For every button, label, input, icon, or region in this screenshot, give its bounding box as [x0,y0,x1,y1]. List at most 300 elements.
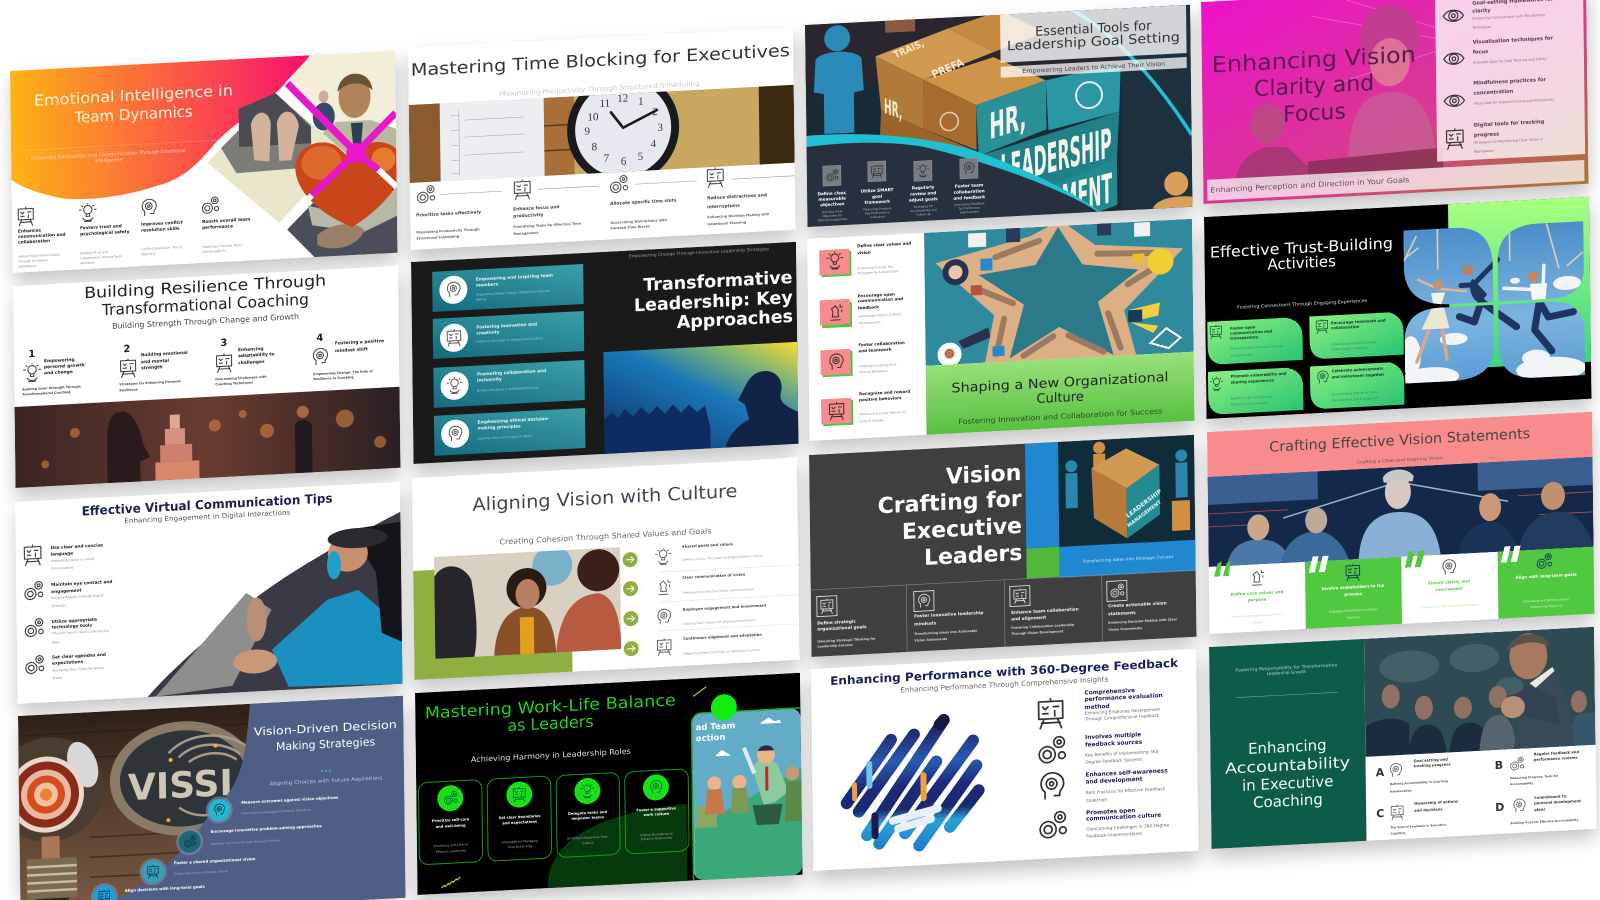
photo: HR cube and figures: MANAGEMENT [1126,499,1163,529]
slide: Enhancing Accountability in Executive Coaching [1209,627,1597,849]
four tool columns: review and [910,190,936,197]
subtitle: Enhancing Engagement in Digital Interactions [124,509,291,525]
benefit columns: performance [202,223,233,231]
right list panel: clarity [1472,8,1491,15]
slide: Mastering Work-Life Balance as Leaders [415,672,814,900]
feature list: performance evaluation [1085,693,1163,703]
four tool columns: Define clear, [817,190,847,196]
step labels: productivity [513,212,543,220]
step labels: Focused Time Blocks [610,224,650,230]
benefit columns: Through Emotional [17,258,48,264]
accountability grid: B [1495,759,1503,772]
tip list: Enhancing Clarity in Virtual [51,557,94,563]
subtitle: Maximizing Productivity Through Structured Scheduling [500,80,700,98]
step labels: interruptions [707,203,740,210]
teal curves [1072,4,1192,141]
four tool columns: Defining Clear [822,209,843,214]
decision items: Fostering Innovation through Visionary Thinking [211,838,280,846]
balance cards: and expectations [502,820,537,826]
numbered steps: strength [141,364,162,371]
phone panel: cartoon team: ection [696,733,725,744]
bottom columns: Transforming Ideas into Actionable [914,629,977,636]
accountability grid: plans [1534,807,1546,812]
tip list: Building Rapport Through Digital [51,593,104,600]
balance cards: Delegate tasks and [568,810,608,816]
photo: HR leadership cubes: HR, [989,94,1027,148]
card: ethics [434,408,585,456]
phone panel: cartoon team: ad Team [696,721,736,733]
photo: clock on wood desk [408,84,795,183]
activity cards: Enhancing Team Cohesion Through [1230,344,1283,351]
quote cards: Crafting Clear and Inspiring Statements [1420,602,1480,609]
quote cards: Aligning Vision with Organizational [1231,612,1284,619]
feature list: feedback sources [1085,740,1143,749]
numbered steps [22,330,385,398]
photo: women in conversation [434,542,621,659]
quote cards: Involve stakeholders in the [1322,583,1385,591]
pink header band: Crafting a Clear and Inspiring Vision [1357,455,1443,465]
photo: HR leadership cubes: HR, [884,94,902,125]
right list panel: Mindfulness practices for [1473,77,1547,87]
card: empowering: Empowering Teams Through Collaborative Decision- [476,289,551,297]
step icons and timeline [416,167,795,204]
activity cards: collaboration [1331,324,1360,330]
quote cards: purpose [1248,596,1267,602]
photo: clock on wood desk: 6 [621,156,627,168]
numbered steps: Overcoming Challenges with [215,375,267,381]
photo: clock on wood desk: 9 [584,125,590,138]
pink header band [1207,412,1593,477]
four tool columns: framework [864,199,890,205]
photo: clock on wood desk: 8 [592,141,598,153]
feature list: Key Benefits of Implementing 360- [1085,749,1160,759]
left list with pink icons: Define clear values and [857,241,911,248]
green title panel: Accountability [1225,753,1350,778]
bottom columns: Vision Statements [914,637,947,643]
decorative squiggles [439,687,708,888]
right list [656,539,799,657]
balance cards: Effective Leadership [436,848,466,854]
bottom columns: mindsets [914,620,937,628]
quote cards [1209,542,1595,634]
decision items: Measuring Success Against Visionary Objectives [241,808,312,815]
balance cards: Prioritize self-care [432,817,470,823]
right list panel: focus [1473,49,1488,56]
card: empowering [432,264,584,312]
right list: Strategies for Effective Vision Communication [683,587,754,595]
four tool columns: objectives [820,201,845,207]
title: Leadership: Key [634,288,793,316]
accountability grid: personal development [1534,799,1581,806]
left list with pink icons: communication and [858,296,903,303]
tip list: engagement [51,588,82,595]
photo: HR leadership cubes: MENT [1061,165,1113,225]
accountability grid: Goal setting and [1414,758,1448,763]
tip list: Utilize appropriate [51,617,97,625]
quote cards: Creation [1347,615,1360,620]
step labels: Prioritize tasks effectively [416,209,481,219]
subtitle: Enhancing Celebration and Communication Through Emotional [31,148,186,162]
four tool columns: Utilize SMART [861,187,894,194]
right list: Continuous alignment and adaptation [683,633,762,641]
title: Focus [1283,99,1346,128]
feature list: Promotes open [1086,808,1135,817]
title box: Empowering Leaders to Achieve Their Vision [1022,61,1165,75]
left list with pink icons: Strategies for Cultural Shift [857,269,899,275]
numbered steps: Building emotional [141,350,188,358]
feature list: Feedback Implementation [1086,831,1142,840]
photo: HR leadership cubes: PREFA [930,57,966,81]
step labels: Reduce distractions and [707,192,767,201]
colour blocks [1025,435,1196,580]
step labels: Prioritizing Tasks for Effective Time [513,221,582,229]
decision items: Enhancing Clarity in Strategic Visions [174,869,229,876]
accountability grid: performance reviews [1534,756,1578,762]
photo: clock on wood desk: 4 [651,138,657,150]
numbered steps: 4 [316,333,323,344]
numbered steps: Resilience in Coaching [313,375,354,381]
numbered steps: and mental [141,358,170,365]
tip list: Use clear and concise [51,542,103,551]
green title panel: Leadership Growth [1267,669,1306,676]
pink header band: Crafting Effective Vision Statements [1269,426,1530,456]
slide: Vision-Driven Decision Making Strategies [0,696,406,900]
slide: Transformative Leadership: Key Approaches [411,242,799,464]
photo: clock on wood desk: 2 [652,106,658,118]
decision items: Align decisions with long-term goals [125,884,205,893]
card: collaboration: inclusivity [477,376,502,384]
decision items: Measure outcomes against vision objectives [241,795,339,805]
green title band: Culture [1036,390,1084,407]
tip list: Tools [51,640,60,645]
left list with pink icons: Encourage open [858,291,895,298]
title box: Leadership Goal Setting [1007,30,1180,54]
four tool columns: Objectives for [822,213,843,218]
activity cards: Encourage teamwork and [1331,318,1386,325]
feature list: Best Practices for Effective Feedback [1086,786,1166,796]
decision items [90,790,340,900]
illustration: slanted capsule strips [846,718,979,849]
step labels: Management [513,231,539,236]
card: ethics: making principles [478,423,521,432]
four tool columns: Regularly [912,184,935,191]
feature list: method [1085,704,1110,711]
green block [413,563,573,680]
title box [1000,5,1187,78]
photo: lightbulb target and VISION sign: VISSI [128,763,233,809]
balance cards: Time and Energy [506,844,533,849]
right list panel: Essential Apps for Goal Tracking and Clarity [1473,57,1547,65]
green title panel: in Executive [1242,772,1334,795]
photo: HR leadership cubes: TRAIS, [892,38,926,61]
benefit columns: resolution skills [141,226,180,234]
slide: Building Resilience Through Transformational Coaching [13,266,401,488]
four tool columns: Improvement [960,209,980,215]
title: Leaders [924,541,1023,571]
balance cards: Strategies for Managing [502,839,538,845]
bottom columns: and alignment [1011,615,1046,622]
green title band [926,352,1195,435]
activity cards: Trust-Building Games for Team [1331,390,1378,396]
quote cards: Goals [1253,620,1262,625]
feature list: Comprehensive [1084,688,1135,697]
bottom columns: organizational goals [817,624,867,633]
photo: lightbulb target and VISION sign [0,717,261,900]
bottom subtitle bar [1207,160,1584,201]
left list with pink icons: Measuring Success: Metrics for [859,410,907,416]
card: innovation: creativity [476,329,500,337]
balance cards [418,769,689,865]
numbered steps: Coaching Techniques [215,380,253,386]
title: Activities [1267,252,1336,274]
green title panel: Enhancing [1248,736,1327,758]
numbered steps: Building Inner Strength Through [22,384,82,392]
benefit columns: Fostering a Positive Team [202,243,242,249]
benefit columns: collaboration [18,238,50,246]
benefit columns: psychological safety [80,229,130,237]
feature list: Through Comprehensive Feedback [1084,713,1160,723]
slide: Effective Virtual Communication Tips [15,482,403,704]
activity cards: Building Trust: Activities for [1231,395,1273,401]
slide: Vision Crafting for Executive Leaders [809,435,1197,657]
right list panel: Techniques [1471,25,1492,30]
photo: HR leadership cubes [805,4,1192,214]
feature list: Collection [1086,797,1107,804]
right list: Employee engagement and involvement [683,603,767,612]
accountability grid: D [1495,801,1504,814]
balance cards: Setting Boundaries to [640,832,673,837]
left list with pink icons: Fostering Inclusivity for a [859,362,897,368]
feature list: Degree Feedback Systems [1085,757,1143,766]
balance cards: Set clear boundaries [499,814,541,820]
step labels: Allocate specific time slots [610,198,677,207]
numbered steps: Fostering a positive [335,338,384,347]
numbered steps: 3 [220,338,227,349]
left list with pink icons: feedback [858,304,879,310]
feature list: and development [1086,777,1143,786]
benefit columns: communication and [18,232,66,240]
card: innovation [433,311,584,359]
right list: Measuring Impact of Vision on Workplace Culture [683,648,760,656]
slide: Crafting Effective Vision Statements [1207,412,1595,634]
bottom columns: Foster innovative leadership [914,610,983,620]
right list panel: Visual Aids for Improved Focus and Productivity [1473,98,1554,106]
gradient title shape [10,55,313,203]
activity cards: transparency [1230,334,1259,341]
photo: clock on wood desk: 7 [604,152,610,165]
four tool columns: Measuring Progress [863,206,892,212]
four tool columns [817,156,986,222]
right list: Shared goals and values [682,542,734,549]
slide: Emotional Intelligence in Team Dynamics [10,51,398,273]
left list with pink icons: Embracing Change: Key [857,264,894,270]
benefit columns: Enhances [18,227,42,235]
numbered steps: Strategies for Enhancing Personal [119,379,181,386]
step labels [416,192,770,242]
right list panel: Strategies for Maintaining Clear Vision in [1474,137,1543,145]
title: Mastering Time Blocking for Executives [411,41,790,81]
tip list: Effective Use of Video Conferencing [52,629,109,636]
accountability grid: Measuring Progress: Tools for [1510,774,1559,780]
feature list [1038,686,1170,842]
tagline: Transforming Ideas into Strategic Futures [1081,554,1174,564]
quote cards: conciseness [1435,586,1464,592]
four tool columns: goal [872,194,883,199]
title: Making Strategies [276,735,376,753]
photo overlay: woman with helmet and team [1231,0,1443,190]
feature list: Overcoming Challenges in 360-Degree [1086,822,1170,833]
title: Crafting for [878,487,1022,519]
accountability grid: Building Trust for Effective Accountability [1510,818,1578,825]
left list with pink icons: Thriving Workplace [858,369,888,374]
four tool columns: and feedback [953,194,985,201]
step labels: Structured Scheduling [416,234,460,241]
four tool columns: Indicators [870,214,885,219]
photo: jumping team in four petals [1399,217,1590,389]
benefit columns: Building Trust and [80,250,108,255]
tip list: Teams [51,676,63,680]
title: Clarity and [1254,71,1374,102]
title: Transformative [643,268,793,296]
photo: HR leadership cubes: LEADERSHIP [1000,120,1112,195]
numbered steps: 2 [123,344,130,355]
numbered steps: Transformational Coaching [22,390,71,397]
title: Vision-Driven Decision [254,718,397,739]
title: Emotional Intelligence in [34,81,233,110]
bright green circle [711,694,737,721]
balance cards: Enhance Productivity [641,836,673,841]
activity cards: Development and Engagement [1332,396,1380,402]
decision items: Encourage innovative problem-solving approaches [211,823,322,834]
accountability grid: Defining Accountability in Coaching [1390,779,1448,786]
card: collaboration [433,360,585,408]
step labels: Intentional Planning [707,220,747,226]
photo: woman with VR headset [145,512,403,697]
balance cards: Prioritizing Self-Care for [433,842,469,848]
activity cards: Trust Exercises [1229,353,1253,358]
bottom columns: Define strategic [817,619,856,627]
four tool columns: Key Performance [865,210,890,215]
four tool columns: collaboration [954,188,985,195]
numbered steps: personal growth [44,362,85,370]
title: Executive [902,514,1022,545]
subtitle: Creating Cohesion Through Shared Values and Goals [499,526,712,546]
left list with pink icons: Foster collaboration [858,340,905,347]
card: empowering: members [476,281,499,289]
green title panel [1209,639,1367,849]
subtitle: Intelligence [94,157,122,165]
bottom columns: Through Vision Development [1011,629,1064,636]
photo: futuristic team meeting [1208,457,1594,567]
bottom columns: Enhancing Decision-Making with Clear [1108,617,1177,625]
bottom columns: Unlocking Strategic Thinking for [817,637,876,644]
activity cards: Creative Approaches to Foster [1331,340,1377,346]
slide: Mastering Time Blocking for Executives [408,28,796,250]
green title panel: Coaching [1253,790,1323,812]
feature list: Enhances self-awareness [1085,768,1168,779]
right list panel: Workplaces [1474,149,1494,154]
title: Vision [946,461,1022,490]
slide: Shaping a New Organizational Culture [807,217,1195,441]
numbered steps: mindset shift [335,346,368,354]
slide: Essential Tools for Leadership Goal Setting [805,1,1193,238]
right list: Clear communication of vision [682,573,746,580]
tip list [24,541,114,682]
slide: Enhancing Vision Clarity and Focus [1201,0,1589,204]
title: Enhancing Performance with 360-Degree Feedback [830,656,1179,688]
title: Mastering Work-Life Balance [425,690,676,722]
numbered steps: Empowering [44,357,75,364]
left list with pink icons: and teamwork [858,347,892,353]
card: ethics: Emphasizing ethical decision- [478,416,550,426]
photo: clock on wood desk: 5 [638,151,644,163]
numbered steps: Empowering Change: The Role of [313,369,373,376]
tip list: language [51,550,73,558]
left list with pink icons: Recognize and reward [859,389,910,396]
photo: coach and glowing tower [15,387,401,488]
activity cards: sharing experiences [1231,377,1275,385]
photo: leader pointing with team [1364,627,1595,757]
card: empowering: Making [476,297,487,302]
quote cards: Statements Regularly [1530,603,1563,609]
step labels: Enhancing Decision-Making with [707,212,770,219]
left list with pink icons [819,241,914,426]
bottom columns: statements [1108,610,1136,617]
photo: speaker and crowd silhouette [603,342,799,454]
accountability grid: A [1376,766,1385,779]
benefit columns [17,194,251,269]
title box: Essential Tools for [1035,19,1152,40]
numbered steps: and change [44,369,73,376]
quote cards: Align with long-term goals [1515,572,1577,580]
benefit columns: Boosts overall team [202,216,251,225]
four tool columns: Accountability and [910,208,937,213]
activity cards: and milestones together [1332,372,1384,379]
balance cards: Building a Supportive Team [567,834,609,841]
numbered steps: Enhancing [238,346,264,353]
benefit columns: Collaboration Among Team [80,254,122,260]
left list with pink icons: vision [857,250,871,255]
subtitle: Building Strength Through Change and Growth [112,312,299,331]
left list with pink icons: Cultural Change [859,418,884,423]
bottom columns: Enhance team collaboration [1011,606,1079,616]
photo: HR cube and figures [1058,435,1195,547]
activity cards: Promote vulnerability and [1231,371,1287,379]
feature list: Involves multiple [1085,732,1141,741]
top tagline: Empowering Change Through Innovative Leadership Strategies [629,246,770,260]
accountability grid: Coaching [1390,831,1405,836]
left list with pink icons: Transformation [857,320,881,325]
activity cards: Celebrate achievements [1332,366,1384,373]
accountability grid: Ownership of actions [1414,799,1459,806]
bottom columns: Leadership Success [817,643,853,649]
accountability grid: Commitment to [1534,794,1567,800]
card: collaboration: Promoting collaboration and [477,368,546,378]
title: Effective Virtual Communication Tips [82,490,333,519]
quote cards: Define core values and [1231,589,1284,597]
slide: Aligning Vision with Culture [412,458,800,680]
card: ethics: Inspiring Vision and Purpose in Teams [478,434,533,441]
benefit columns: Members [80,261,95,265]
activity cards: Effective Communication [1231,401,1269,407]
step labels: Enhance focus and [513,204,560,213]
tip list: Managing Time Zones for Global [52,666,104,673]
photo: clock on wood desk: 11 [599,97,610,110]
green arrow buttons [623,552,639,657]
right list: Aligning Team Goals with Organizational Vision [683,618,756,626]
right list panel: concentration [1473,89,1514,97]
numbered steps: challenges [238,359,265,366]
